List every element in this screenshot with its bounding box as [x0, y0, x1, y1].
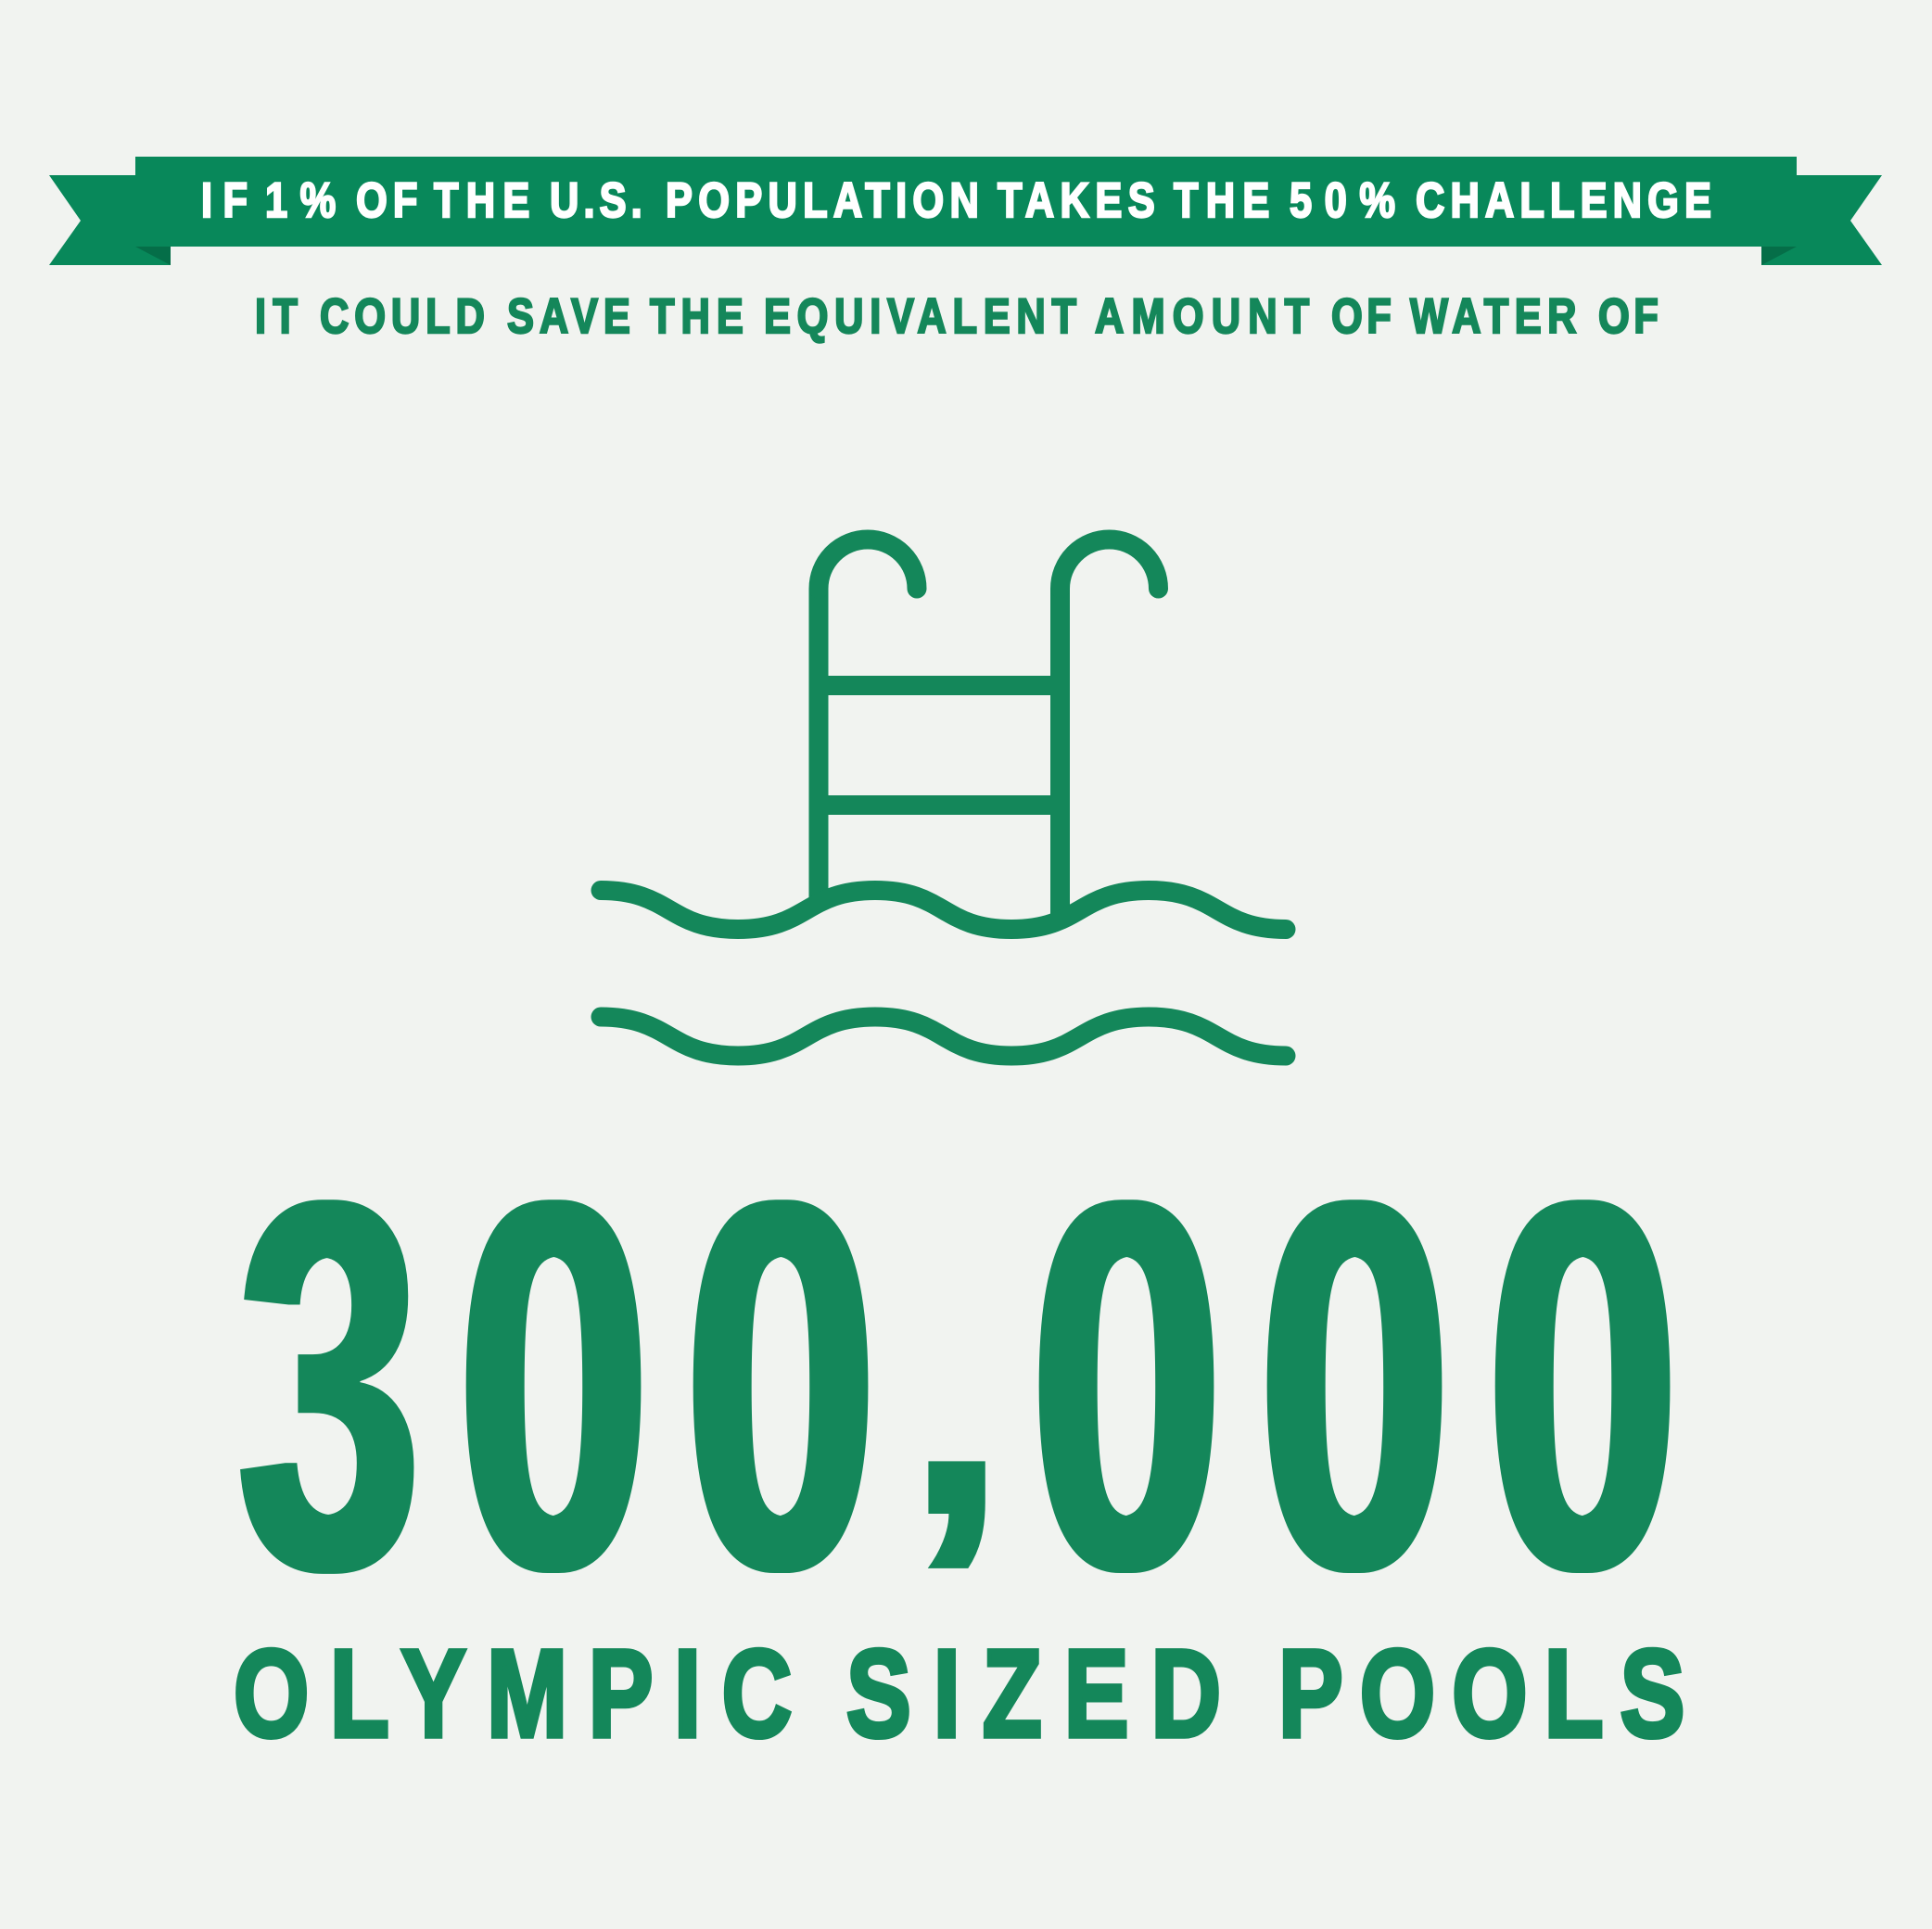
subheading: WATER [1410, 289, 1577, 344]
banner ribbon [49, 157, 1882, 265]
subheading [255, 289, 1659, 344]
banner heading: 1% [265, 173, 336, 228]
big number: 00 [458, 1090, 877, 1680]
subheading: THE [650, 289, 744, 344]
banner heading: THE [434, 173, 529, 228]
subheading: SAVE [507, 289, 630, 344]
ribbon main band [135, 157, 1797, 247]
banner heading: THE [1174, 173, 1269, 228]
icon: pool ladder and waves [601, 539, 1286, 1056]
ribbon right fold [1761, 247, 1797, 265]
subheading: COULD [320, 289, 485, 344]
caption: olympic sized pools: SIZED [846, 1625, 1221, 1763]
banner heading: IF [201, 173, 248, 228]
subheading: AMOUNT [1095, 289, 1310, 344]
lower wave [601, 1017, 1286, 1056]
caption: olympic sized pools: POOLS [1278, 1625, 1684, 1763]
big number: , [911, 1196, 1001, 1589]
right ladder rail [1061, 539, 1159, 918]
caption: olympic sized pools [234, 1625, 1684, 1763]
banner heading: 50% [1290, 173, 1395, 228]
banner heading: POPULATION [666, 173, 979, 228]
banner heading: OF [356, 173, 417, 228]
banner heading [201, 173, 1711, 228]
subheading: EQUIVALENT [764, 289, 1076, 344]
ribbon left tail [49, 175, 171, 265]
caption: olympic sized pools: OLYMPIC [234, 1625, 792, 1763]
banner heading: CHALLENGE [1416, 173, 1711, 228]
left ladder rail [819, 539, 917, 904]
subheading: OF [1598, 289, 1659, 344]
ribbon right tail [1761, 175, 1882, 265]
banner heading: U.S. [550, 173, 642, 228]
subheading: OF [1331, 289, 1392, 344]
upper wave [601, 890, 1286, 929]
banner heading: TAKES [998, 173, 1155, 228]
subheading: IT [255, 289, 298, 344]
ribbon left fold [135, 247, 171, 265]
big number [238, 1090, 1679, 1681]
big number: 3 [238, 1091, 420, 1681]
big number: 000 [1031, 1090, 1679, 1680]
ladder rungs [819, 686, 1061, 805]
